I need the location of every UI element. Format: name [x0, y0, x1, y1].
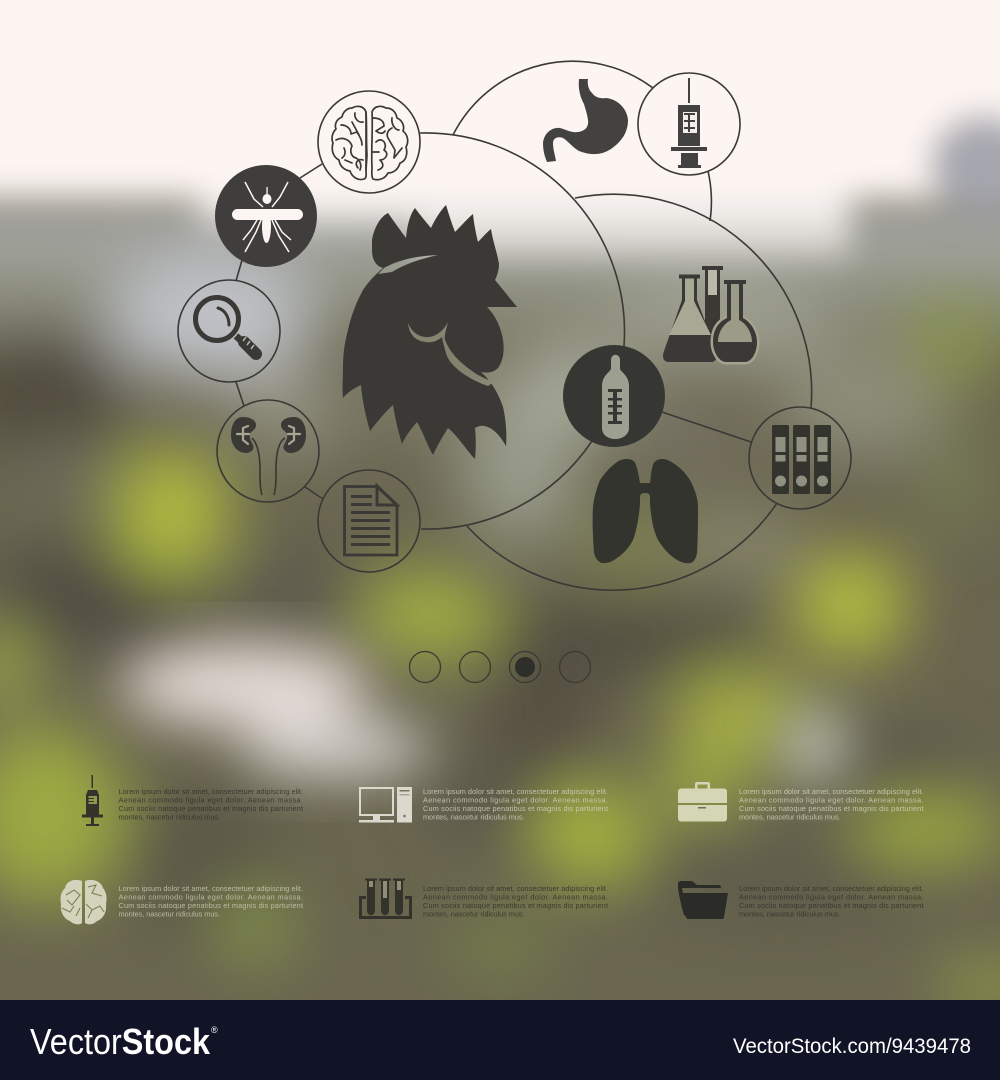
text block: row 1 column 2: Aenean commodo ligula eget dolor. Aenean massa. [423, 796, 608, 804]
text block: row 2 column 1: Aenean commodo ligula eget dolor. Aenean massa. [118, 892, 303, 902]
text block: row 2 column 3: Cum sociis natoque penatibus et magnis dis parturient [739, 901, 924, 910]
icon: computer [359, 787, 412, 822]
text block: row 1 column 2: Cum sociis natoque penatibus et magnis dis parturient [423, 804, 608, 813]
footer bar [0, 1000, 1000, 1080]
central rooster head [343, 205, 517, 459]
text block: row 2 column 2: Cum sociis natoque penatibus et magnis dis parturient [423, 901, 608, 910]
node: kidneys [217, 400, 319, 502]
icon: lungs [593, 459, 698, 563]
text block: row 1 column 1: Aenean commodo ligula eget dolor. Aenean massa. [118, 796, 303, 804]
text block: row 1 column 1: Lorem ipsum dolor sit amet, consectetuer adipiscing elit. [118, 787, 303, 796]
text block: row 2 column 3: montes, nascetur ridiculus mus. [739, 910, 840, 918]
arc: central circle lower [421, 441, 592, 529]
connector: mosquito to brain [300, 164, 322, 178]
text block: row 2 column 3 [739, 884, 924, 918]
text block: row 2 column 1: Lorem ipsum dolor sit amet, consectetuer adipiscing elit. [118, 884, 303, 893]
text block: row 1 column 3: montes, nascetur ridiculus mus. [739, 812, 840, 822]
footer logo: VectorStock [30, 1021, 211, 1062]
text block: row 2 column 1: Cum sociis natoque penatibus et magnis dis parturient [118, 901, 303, 910]
text block: row 1 column 1: Cum sociis natoque penatibus et magnis dis parturient [118, 804, 303, 813]
connector: mosquito to magnifier [236, 260, 242, 281]
stomach icon [543, 79, 628, 162]
connector: kidneys to document [305, 487, 323, 499]
text block: row 1 column 3: Cum sociis natoque penatibus et magnis dis parturient [739, 804, 924, 813]
connected circle diagram [236, 61, 812, 590]
icon: folder [678, 881, 728, 919]
icon: laboratory flasks [663, 266, 757, 362]
text block: row 1 column 1: montes, nascetur ridiculus mus. [118, 812, 220, 822]
text block: row 2 column 2: Lorem ipsum dolor sit amet, consectetuer adipiscing elit. [423, 884, 608, 893]
text block: row 2 column 2: Aenean commodo ligula eget dolor. Aenean massa. [423, 892, 608, 902]
text block: row 2 column 2 [423, 884, 608, 918]
node: mosquito [215, 165, 317, 267]
node: binders [749, 407, 851, 509]
text block: row 2 column 3: Lorem ipsum dolor sit amet, consectetuer adipiscing elit. [739, 884, 924, 893]
node: bottle [563, 345, 665, 447]
arc: central circle upper [420, 133, 624, 346]
footer url: VectorStock.com/9439478 [733, 1035, 971, 1058]
text block: row 1 column 2: Lorem ipsum dolor sit amet, consectetuer adipiscing elit. [423, 787, 608, 796]
arc: flask circle upper [575, 194, 812, 408]
icon: test tube rack [359, 878, 412, 919]
text block: row 1 column 1 [118, 787, 303, 822]
text block: row 2 column 1: montes, nascetur ridiculus mus. [118, 910, 220, 918]
node: brain outline [318, 91, 420, 193]
icon: small syringe [82, 775, 103, 826]
connector: bottle to binders [662, 412, 751, 442]
node: document [318, 470, 420, 572]
text block: row 1 column 3: Lorem ipsum dolor sit amet, consectetuer adipiscing elit. [739, 787, 924, 796]
text block: row 1 column 3: Aenean commodo ligula eget dolor. Aenean massa. [739, 796, 924, 804]
registered mark: ® [211, 1025, 218, 1035]
text block: row 2 column 1 [118, 884, 303, 918]
text block: row 2 column 3: Aenean commodo ligula eget dolor. Aenean massa. [739, 892, 924, 902]
pagination dots [410, 652, 590, 682]
text block: row 1 column 2 [423, 787, 608, 822]
text block: row 1 column 3 [739, 787, 924, 822]
arc: stomach circle top [453, 61, 653, 135]
arc: stomach circle right [708, 171, 711, 221]
text block: row 1 column 2: montes, nascetur ridiculus mus. [423, 812, 524, 822]
node: syringe [638, 73, 740, 175]
connector: magnifier to kidneys [236, 382, 244, 406]
arc: lungs circle lower [466, 503, 777, 590]
icon: small brain [60, 880, 107, 924]
icon: briefcase [678, 782, 727, 822]
node: magnifier [178, 280, 280, 382]
text block: row 2 column 2: montes, nascetur ridiculus mus. [423, 910, 524, 918]
